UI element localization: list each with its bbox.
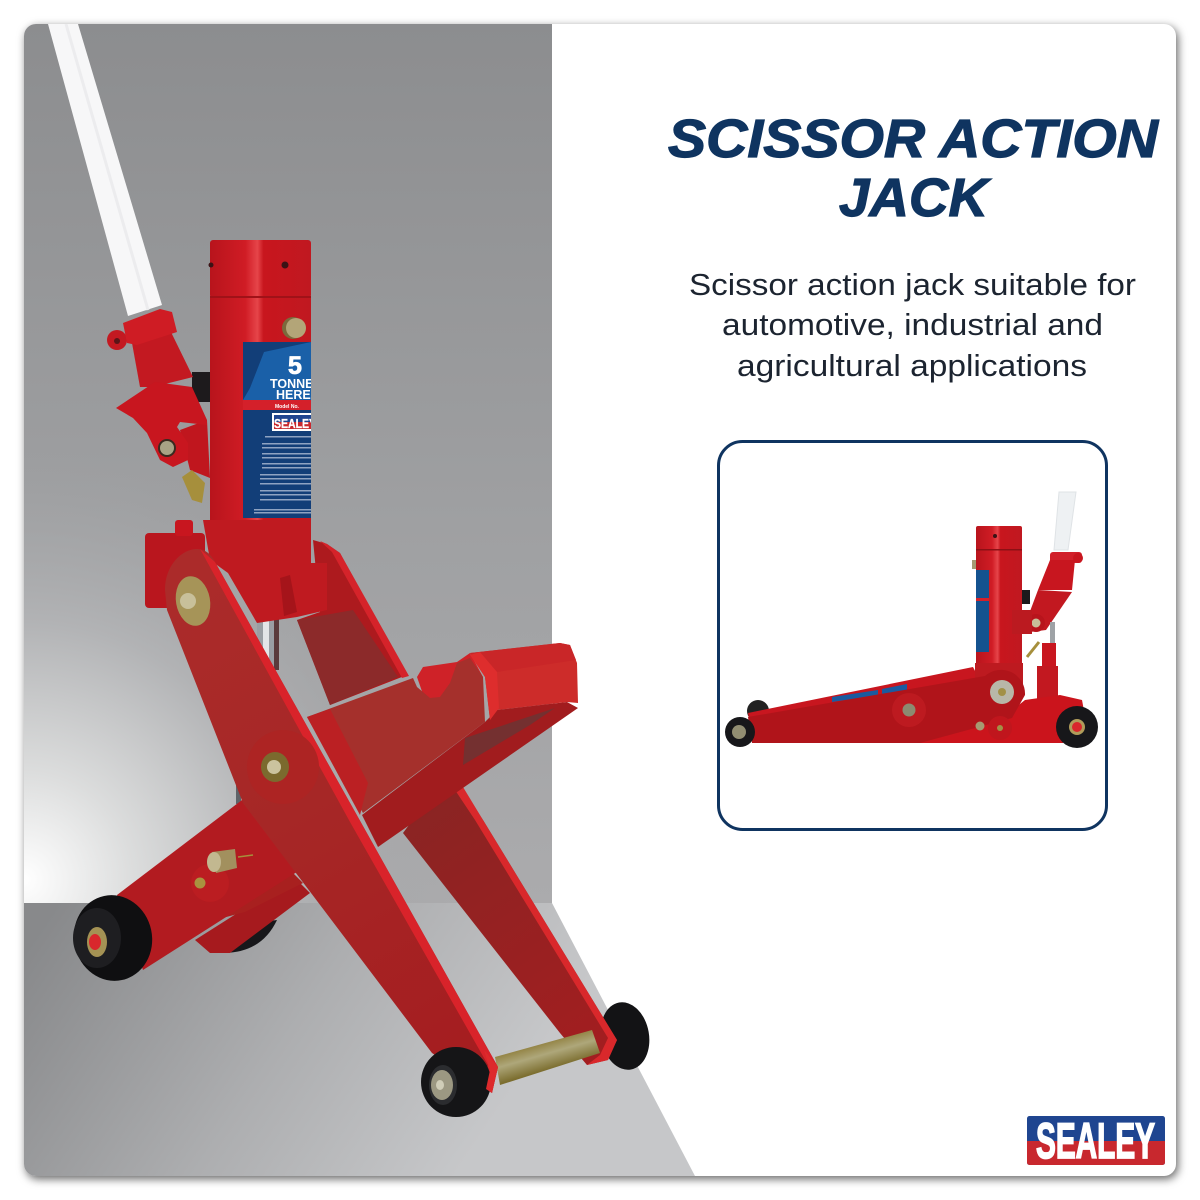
side view rear wheel	[747, 700, 769, 722]
axle bar	[495, 1030, 600, 1085]
title: JACK	[839, 168, 992, 228]
side view pump cylinder	[1027, 642, 1058, 702]
side view centre pivot	[892, 693, 926, 727]
side view handle	[1054, 492, 1076, 550]
brass screw	[282, 317, 306, 339]
panel: side view of jack	[718, 442, 1106, 830]
title: SCISSOR ACTION	[668, 109, 1159, 169]
label tonne text: TONNE	[270, 377, 314, 391]
front wheel	[421, 1047, 491, 1117]
label here text: HERE	[276, 388, 311, 402]
side view right wheel	[1056, 706, 1098, 748]
label instructions	[254, 436, 311, 514]
floor	[24, 903, 695, 1176]
side view base	[918, 695, 1085, 743]
wall background	[24, 24, 552, 904]
label model text: Model No.	[275, 404, 299, 410]
cylinder label	[243, 342, 317, 518]
rear scissor arm	[297, 540, 617, 1065]
label logo: SEALEY	[274, 416, 316, 431]
description	[689, 267, 1136, 383]
side view cylinder	[972, 526, 1023, 689]
pump lever bracket	[116, 382, 210, 503]
side view small pin	[976, 716, 1012, 740]
cast cylinder base	[145, 520, 327, 623]
rear right wheel	[603, 1002, 650, 1070]
description: automotive, industrial and	[722, 307, 1103, 342]
white pump handle	[48, 24, 162, 316]
upper pivot bolt	[176, 576, 210, 626]
side view large pivot	[990, 680, 1014, 704]
title	[668, 109, 1159, 228]
centre pivot disc and bolt	[261, 736, 319, 782]
panel: photo backdrop	[24, 24, 695, 1176]
lower dark roller	[225, 920, 277, 953]
front arm end cap	[486, 1066, 498, 1093]
side view main arm	[748, 670, 1025, 743]
capacity number: 5	[288, 352, 302, 380]
side view rail label	[832, 684, 907, 702]
side view pump head	[1012, 552, 1083, 646]
side view left wheel	[725, 717, 755, 747]
main cylinder	[208, 240, 311, 525]
side view upper rail	[748, 667, 985, 725]
left wheel	[73, 895, 152, 981]
front scissor arm	[165, 549, 498, 1093]
platform saddle	[307, 653, 578, 847]
piston rod	[236, 618, 279, 804]
label logo	[272, 413, 311, 431]
lower-left arm	[117, 800, 310, 970]
description: agricultural applications	[737, 348, 1087, 383]
description: Scissor action jack suitable for	[689, 267, 1136, 302]
saddle pad	[470, 643, 578, 720]
grease nipple and pin	[191, 849, 253, 902]
handle socket	[107, 309, 210, 402]
jack photo illustration	[48, 24, 655, 1117]
